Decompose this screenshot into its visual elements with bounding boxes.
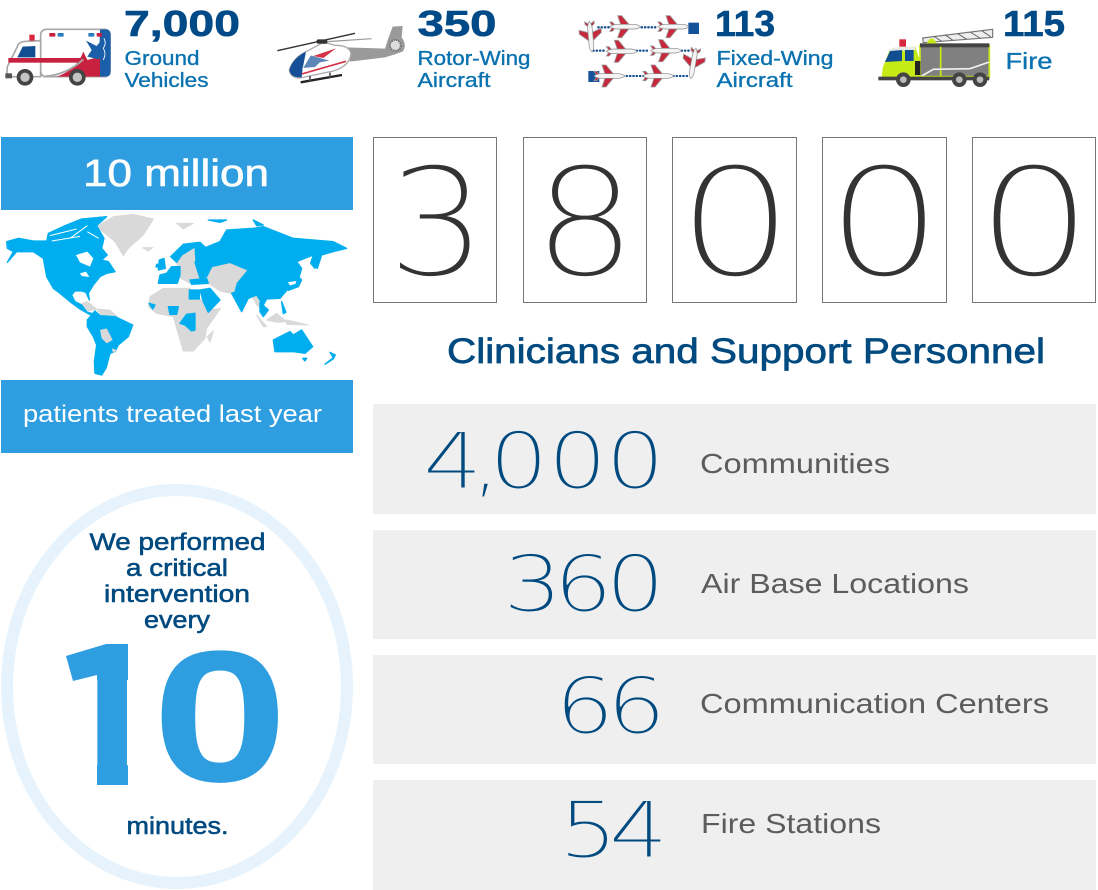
banner: 10 million [1, 137, 353, 210]
big number: 10: 0 [152, 612, 288, 821]
digit box: 8: 8 [533, 137, 637, 311]
digit box: 0: 0 [826, 137, 943, 311]
label: Rotor-Wing Aircraft [418, 47, 530, 92]
row: 360 Air Base Locations: Air Base Locations [701, 568, 969, 599]
text: We performed a critical intervention every: a critical [126, 555, 228, 582]
panel: critical intervention every 10 minutes [7, 490, 347, 883]
panel: 3800 digit counter [374, 137, 1096, 311]
stat: rotor-wing aircraft [277, 3, 530, 92]
label: Fixed-Wing Aircraft [716, 47, 834, 92]
value: 115: 115 [1003, 3, 1065, 44]
value: 113: 113 [715, 3, 775, 44]
row: 54 Fire Stations [373, 780, 1096, 890]
big number: 10 [66, 644, 278, 785]
label: Ground Vehicles [124, 47, 208, 92]
row: 360 Air Base Locations: 360 [503, 539, 665, 630]
label: Rotor-Wing Aircraft: Rotor-Wing [418, 47, 530, 70]
icon: helicopter [277, 26, 405, 82]
heading: Clinicians and Support Personnel: Clinicians and Support Personnel [447, 332, 1045, 371]
row: 360 Air Base Locations [373, 530, 1096, 639]
panel: network statistics [373, 404, 1096, 890]
label: Fire: Fire [1006, 48, 1052, 74]
text: minutes.: minutes. [126, 813, 228, 840]
banner: patients treated last year: patients treated last year [23, 401, 322, 428]
value: 7,000: 7,000 [124, 3, 240, 44]
icon: fire truck [878, 29, 993, 87]
text: We performed a critical intervention every: We performed [90, 529, 266, 556]
icon: planes in formation [578, 16, 707, 87]
text: We performed a critical intervention every: intervention [104, 581, 250, 608]
text: We performed a critical intervention every [90, 529, 266, 634]
row: 66 Communication Centers: 66 [555, 661, 666, 752]
world map [7, 214, 347, 375]
row: 4,000 Communities: Communities [700, 448, 890, 479]
big number: 10: 1 [47, 610, 167, 826]
banner: 10 million: 10 million [83, 153, 269, 195]
label: Fixed-Wing Aircraft: Fixed-Wing [716, 47, 834, 70]
stat: fire [878, 3, 1065, 87]
row: 54 Fire Stations: Fire Stations [701, 808, 881, 839]
banner: patients treated last year [1, 380, 353, 453]
label: Ground Vehicles: Vehicles [124, 69, 208, 92]
value: 350: 350 [418, 3, 496, 44]
icon: ambulance [5, 29, 111, 86]
row: 54 Fire Stations: 54 [558, 785, 668, 876]
digit box: 0: 0 [976, 137, 1093, 311]
digit box: 3: 3 [387, 137, 487, 311]
stat: ground vehicles [5, 3, 240, 92]
stat: fixed-wing aircraft [578, 3, 834, 92]
oval ring [7, 490, 347, 883]
label: Fixed-Wing Aircraft: Aircraft [716, 69, 793, 92]
row: 4,000 Communities: 4,000 [423, 416, 665, 507]
row: 66 Communication Centers: Communication Centers [700, 688, 1049, 719]
text: We performed a critical intervention every: every [144, 607, 210, 634]
label: Ground Vehicles: Ground [124, 47, 200, 70]
panel: patients treated [1, 137, 353, 453]
row: 4,000 Communities [373, 404, 1096, 514]
digit box: 0: 0 [677, 137, 794, 311]
label: Rotor-Wing Aircraft: Aircraft [418, 69, 491, 92]
row: 66 Communication Centers [373, 655, 1096, 764]
